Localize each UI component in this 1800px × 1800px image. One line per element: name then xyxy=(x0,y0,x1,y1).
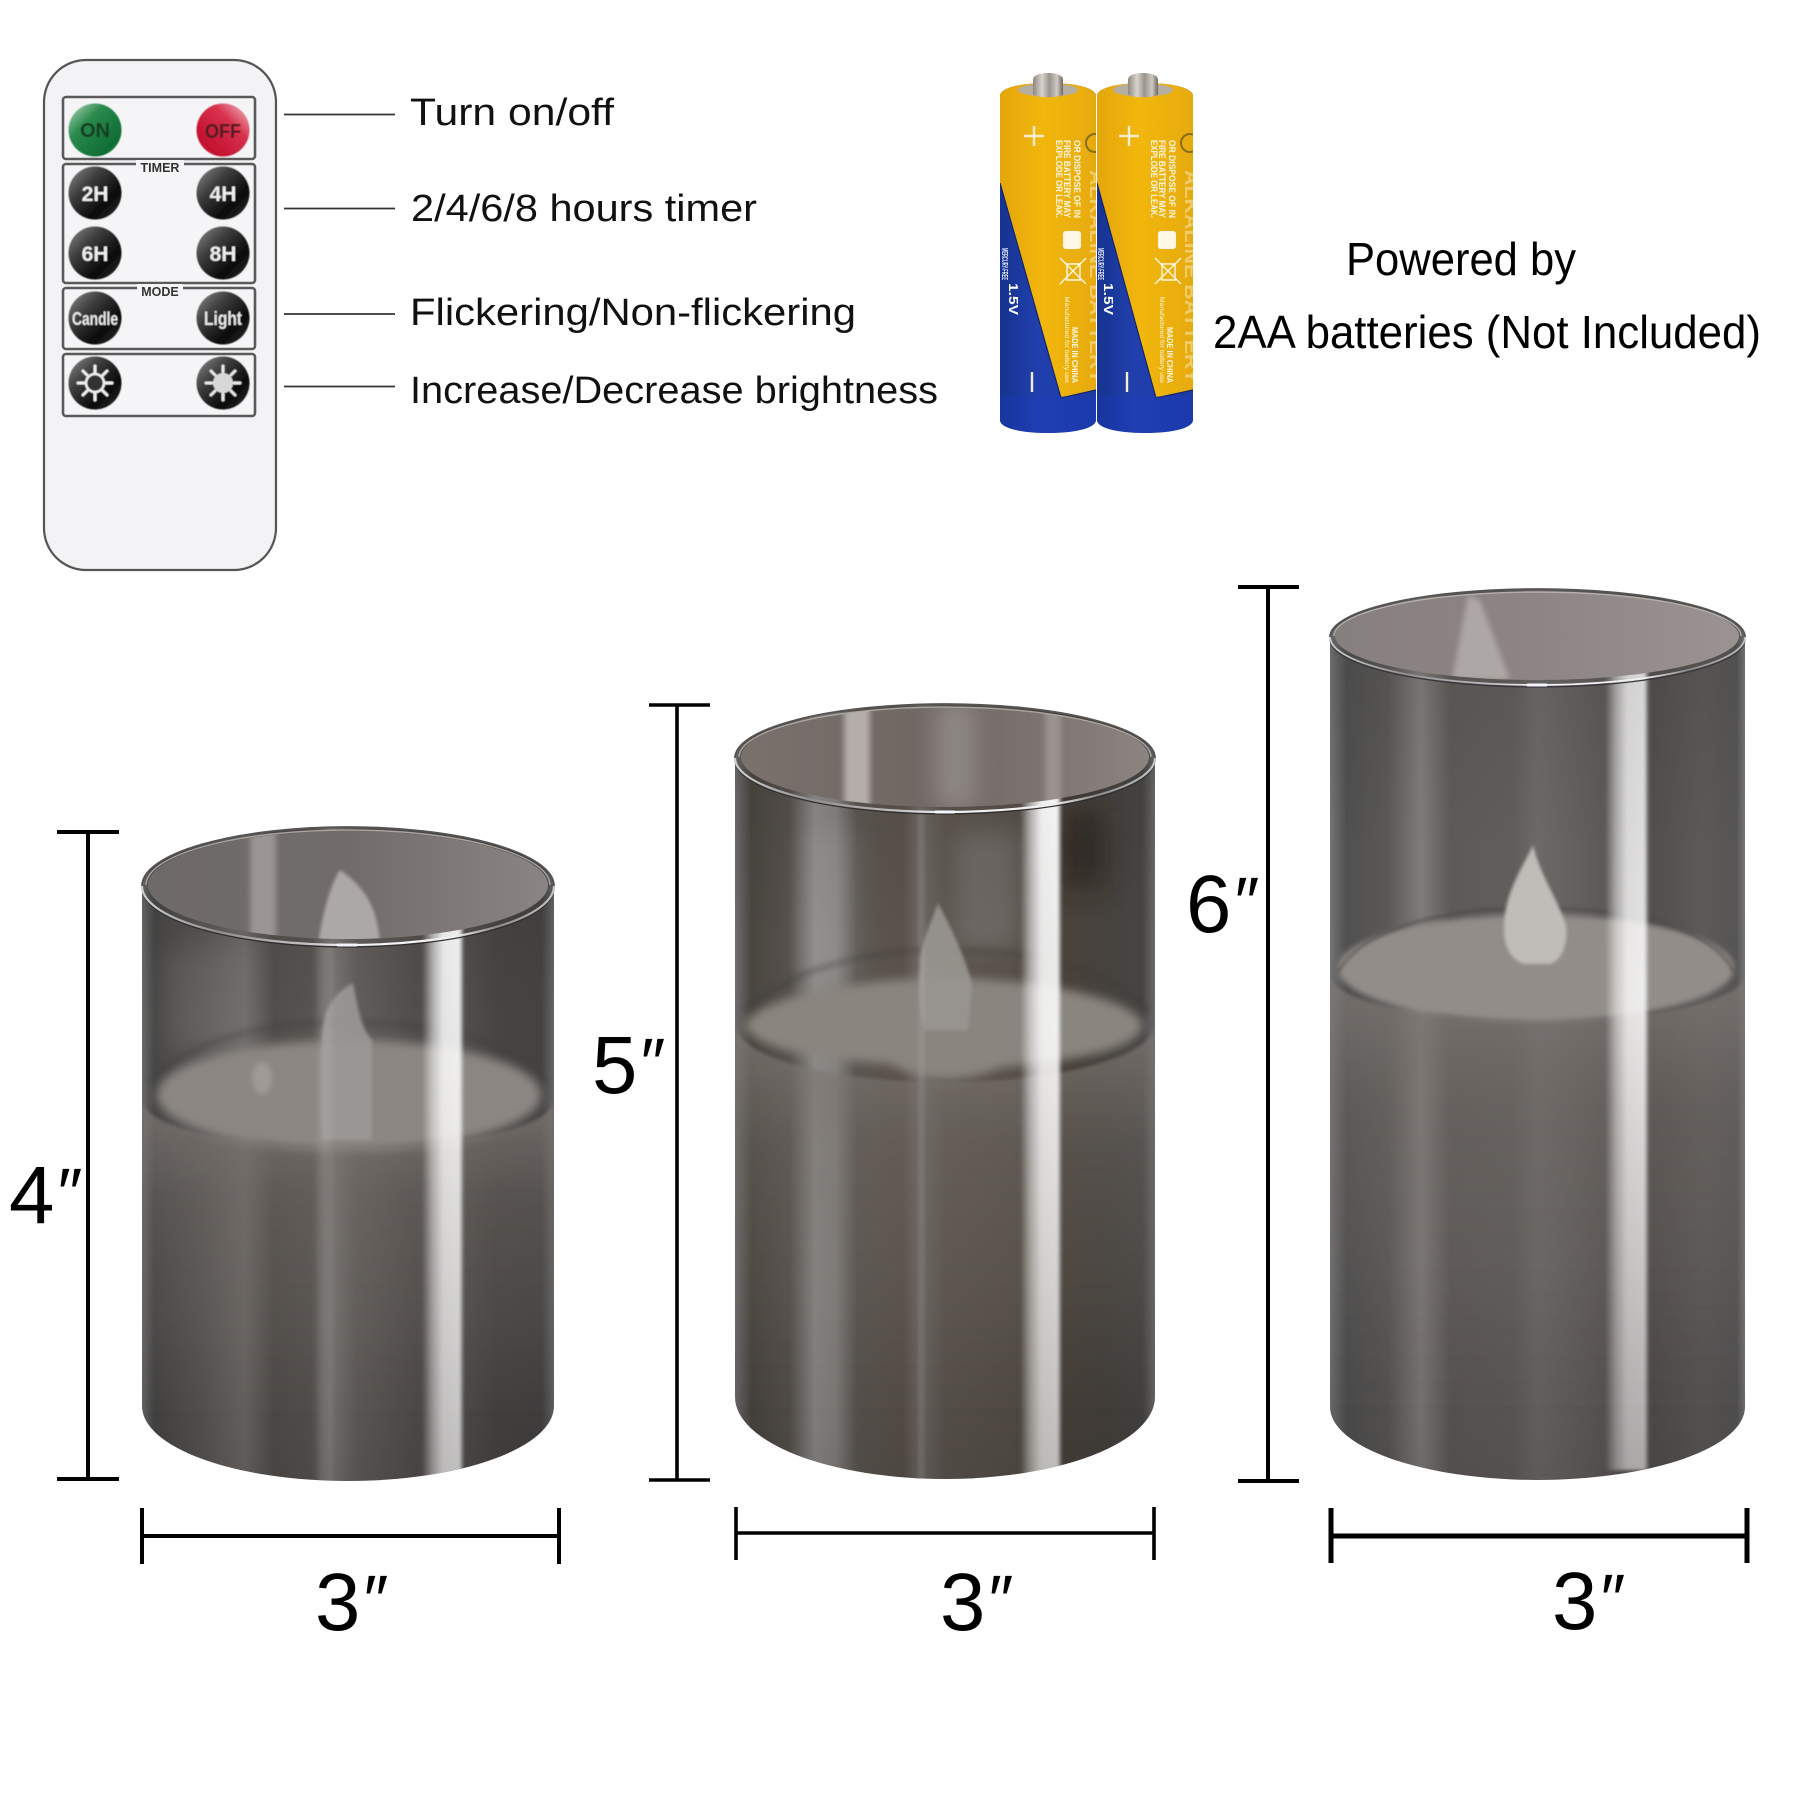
brand text xyxy=(1085,133,1096,378)
glass body xyxy=(1330,580,1745,1490)
button: increase brightness xyxy=(68,356,122,410)
dimension: 5 inch height: ″ xyxy=(637,1024,664,1102)
battery label: EXPLODE OR LEAK. xyxy=(1148,140,1159,218)
wax top xyxy=(792,948,1014,981)
battery caption: Powered by xyxy=(1346,233,1576,285)
battery label: OR DISPOSE OF IN xyxy=(1071,140,1082,218)
dimension: 4 inch candle width: ″ xyxy=(360,1561,387,1639)
button panel: power xyxy=(63,97,255,159)
dimension: 5 inch height xyxy=(592,704,710,1480)
battery label: Manufactured for battery use xyxy=(1063,297,1069,384)
dimension: 6 inch height: 6 xyxy=(1186,859,1232,950)
button: 8H: 8H xyxy=(210,243,236,266)
button: candle xyxy=(68,292,122,344)
button: candle: Candle xyxy=(72,309,118,329)
glass highlight xyxy=(422,929,465,1476)
button: on xyxy=(68,104,122,156)
dimension: 4 inch candle width: 3 xyxy=(315,1557,361,1648)
dimension: 6 inch height xyxy=(1186,587,1299,1481)
callout: brightness: Increase/Decrease brightness xyxy=(410,370,938,412)
battery: right xyxy=(1097,73,1193,433)
candle: 5 inch xyxy=(735,700,1155,1490)
battery label: OR DISPOSE OF IN xyxy=(1166,140,1177,218)
battery: left xyxy=(1000,73,1096,433)
dimension: 4 inch height: ″ xyxy=(54,1154,81,1232)
dimension: 4 inch height xyxy=(9,832,119,1479)
battery caption xyxy=(1213,233,1761,358)
cap recess xyxy=(1018,84,1078,96)
open top xyxy=(148,831,548,939)
dimension: 5 inch candle width: ″ xyxy=(985,1561,1012,1639)
button: 2H xyxy=(68,166,122,220)
glass body xyxy=(735,700,1155,1490)
terminal xyxy=(1033,73,1063,97)
button panel: mode xyxy=(63,288,255,349)
candle: 4 inch xyxy=(142,820,554,1490)
battery label xyxy=(1000,126,1086,392)
rim xyxy=(735,704,1155,814)
button: 4H: 4H xyxy=(210,183,236,206)
remote body xyxy=(44,60,276,570)
brand text: ALKALINE BATTERY xyxy=(1181,170,1201,383)
button: on: ON xyxy=(80,120,110,142)
battery label: MERCURY-FREE xyxy=(1096,248,1105,280)
button: 2H: 2H xyxy=(82,183,108,206)
battery label: MADE IN CHINA xyxy=(1165,327,1174,383)
battery label: FIRE BATTERY MAY xyxy=(1156,140,1167,219)
button: 6H xyxy=(68,226,122,280)
battery body xyxy=(1097,70,1193,441)
rim xyxy=(1330,589,1745,687)
rim reflections xyxy=(1452,595,1510,680)
wax top xyxy=(202,1020,366,1048)
dimension: 6 inch candle width: 3 xyxy=(1552,1556,1598,1647)
callout: turn on/off: Turn on/off xyxy=(410,92,614,134)
dimension: 5 inch height: 5 xyxy=(592,1020,638,1111)
dimension: 6 inch height: ″ xyxy=(1231,863,1258,941)
button: decrease brightness xyxy=(196,356,250,410)
dimension: 6 inch candle width xyxy=(1331,1508,1747,1647)
battery label xyxy=(1096,126,1181,392)
remote control xyxy=(44,60,276,570)
dimension: 5 inch candle width: 3 xyxy=(940,1557,986,1648)
brand text xyxy=(1180,133,1193,380)
battery label: MERCURY-FREE xyxy=(1000,248,1009,280)
battery label: Manufactured for battery use xyxy=(1158,297,1164,384)
button: 6H: 6H xyxy=(82,243,108,266)
rim reflections xyxy=(844,700,1061,810)
dimension: 6 inch candle width: ″ xyxy=(1597,1560,1624,1638)
glass highlight xyxy=(1605,640,1649,1470)
wax top xyxy=(1338,915,1734,1021)
button: 8H xyxy=(196,226,250,280)
candle: 6 inch xyxy=(1330,580,1745,1490)
dimension: 4 inch height: 4 xyxy=(9,1150,55,1241)
open top xyxy=(741,707,1149,807)
button: off: OFF xyxy=(205,121,241,143)
button: light: Light xyxy=(204,309,243,330)
battery caption: 2AA batteries (Not Included) xyxy=(1213,306,1761,358)
battery label: FIRE BATTERY MAY xyxy=(1061,140,1072,219)
glass highlight xyxy=(1020,740,1062,1480)
open top xyxy=(1335,592,1739,680)
rim xyxy=(142,827,554,947)
button panel: brightness xyxy=(63,354,255,416)
rim reflections xyxy=(248,834,381,939)
dimension: 4 inch candle width xyxy=(142,1508,559,1648)
mode heading: MODE xyxy=(141,285,179,299)
button: light xyxy=(196,292,250,344)
terminal xyxy=(1128,73,1158,97)
flame xyxy=(919,903,972,1030)
dimension: 5 inch candle width xyxy=(736,1507,1154,1648)
battery label: EXPLODE OR LEAK. xyxy=(1053,140,1064,218)
button: off xyxy=(196,104,250,156)
brand text: ALKALINE BATTERY xyxy=(1086,170,1106,383)
callout: flickering: Flickering/Non-flickering xyxy=(410,292,856,334)
flame xyxy=(1504,845,1566,964)
battery label: MADE IN CHINA xyxy=(1070,327,1079,383)
glass body xyxy=(142,820,554,1490)
battery label: 1.5V xyxy=(1101,283,1116,315)
callout: hours timer: 2/4/6/8 hours timer xyxy=(411,188,757,230)
flame xyxy=(320,983,372,1140)
battery body xyxy=(1000,70,1096,441)
battery label: 1.5V xyxy=(1006,283,1021,315)
cap recess xyxy=(1113,84,1173,96)
button panel: timer xyxy=(63,164,255,283)
timer heading: TIMER xyxy=(141,161,179,175)
button: 4H xyxy=(196,166,250,220)
